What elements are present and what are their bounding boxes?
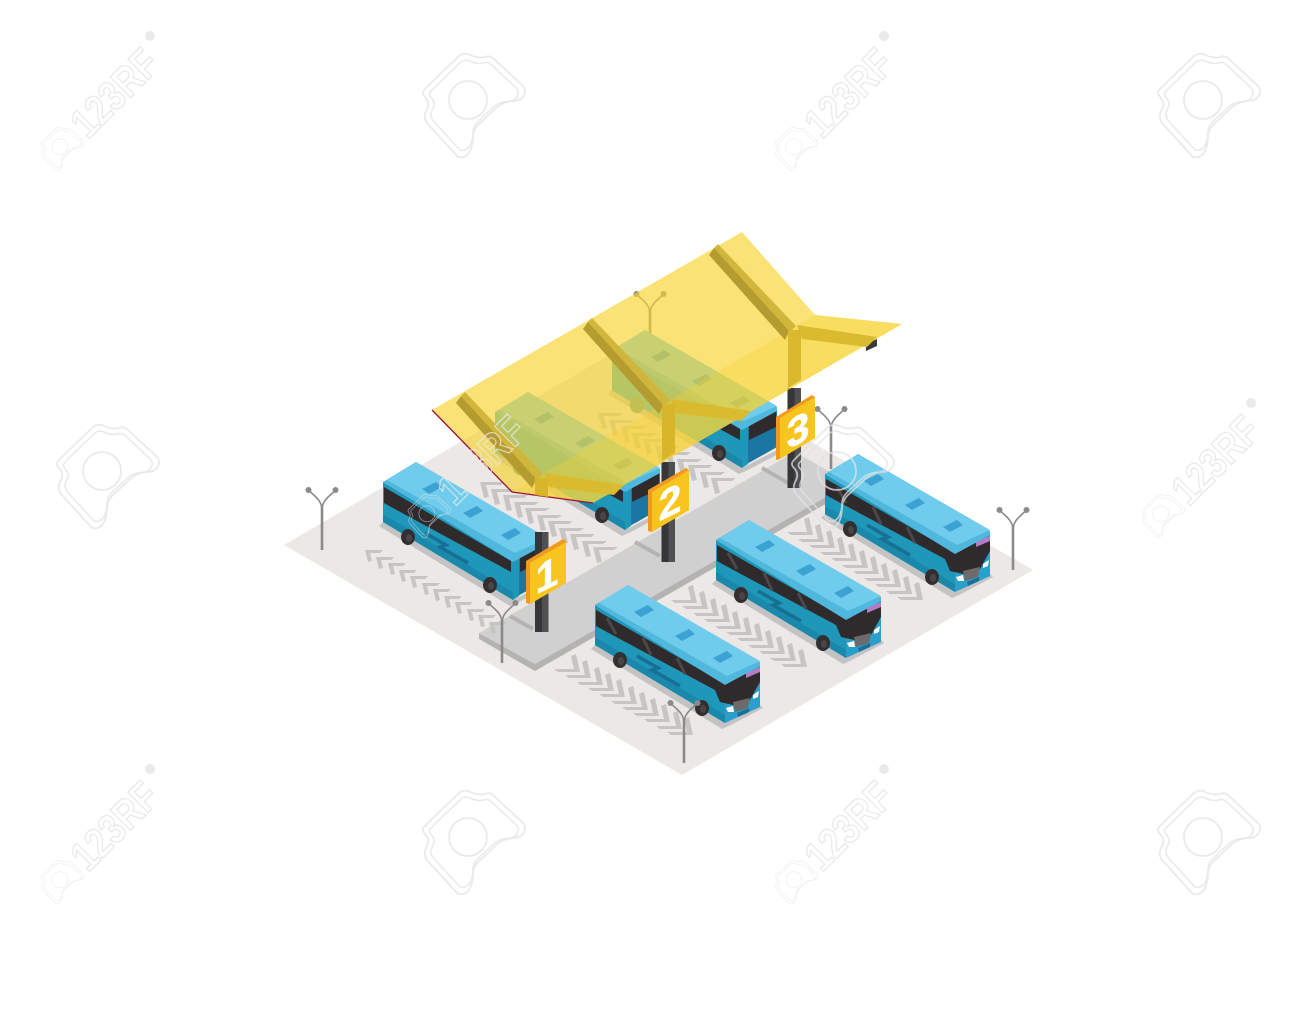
watermark: stock logo middle right: 123RF — [1162, 407, 1269, 513]
watermark: stock logo bottom centre — [775, 764, 902, 904]
watermark: stock logo top left — [41, 31, 168, 171]
watermark: stock logo top left: 123RF — [61, 40, 168, 146]
parking lane chevrons: under canopy — [598, 413, 736, 494]
central boarding platform — [479, 452, 850, 671]
watermark: stock logo bottom left — [41, 764, 168, 904]
watermark: stock logo middle centre: 123RF — [428, 407, 535, 513]
street lamp: far right — [996, 507, 1030, 570]
street lamp: front corner — [668, 700, 700, 763]
ground plaza — [284, 340, 1033, 775]
watermark: stock logo top centre — [775, 31, 902, 171]
canopy end bracket — [866, 339, 877, 351]
parking lane chevrons: front-left row — [365, 550, 507, 634]
watermark: stock logo middle centre — [408, 407, 535, 538]
translucent yellow canopy roof — [432, 232, 902, 503]
parking lane chevrons: middle row — [671, 585, 807, 667]
watermark: stock logo middle right — [1142, 398, 1269, 538]
sign: bay 3: 3 — [787, 403, 809, 459]
bus at bay 1 — [379, 462, 551, 606]
parked bus front — [591, 585, 763, 729]
bus sides seen through the canopy — [495, 362, 730, 502]
sign: bay 2 — [648, 468, 689, 532]
bus at bay 3 — [608, 330, 780, 474]
sign: bay 1 — [526, 539, 566, 604]
watermark: stock logo bottom left: 123RF — [61, 773, 168, 879]
street lamp: behind canopy — [634, 291, 666, 354]
support pole 1 — [535, 532, 548, 632]
watermark: stock logo top centre: 123RF — [795, 40, 902, 146]
sign: bay 1: 1 — [536, 548, 558, 604]
parked bus middle — [712, 520, 884, 664]
street lamp: behind bus 6 — [814, 406, 848, 469]
canopy struts — [456, 244, 877, 497]
street lamp: platform end — [486, 600, 518, 663]
sign: bay 2: 2 — [659, 475, 681, 531]
parking lane chevrons: behind bus 1 — [480, 482, 618, 563]
sign: bay 3 — [776, 395, 815, 460]
watermark: stock logo bottom centre: 123RF — [795, 773, 902, 879]
watermark: camera marks — [57, 54, 1260, 894]
parking lane chevrons: right row — [787, 517, 923, 600]
parking lane chevrons: front row — [554, 654, 693, 735]
street lamp: far left — [306, 487, 338, 550]
bus at bay 2 — [491, 392, 663, 536]
parked bus right — [821, 454, 993, 598]
support pole 3 — [788, 388, 801, 488]
support pole 2 — [662, 462, 675, 562]
